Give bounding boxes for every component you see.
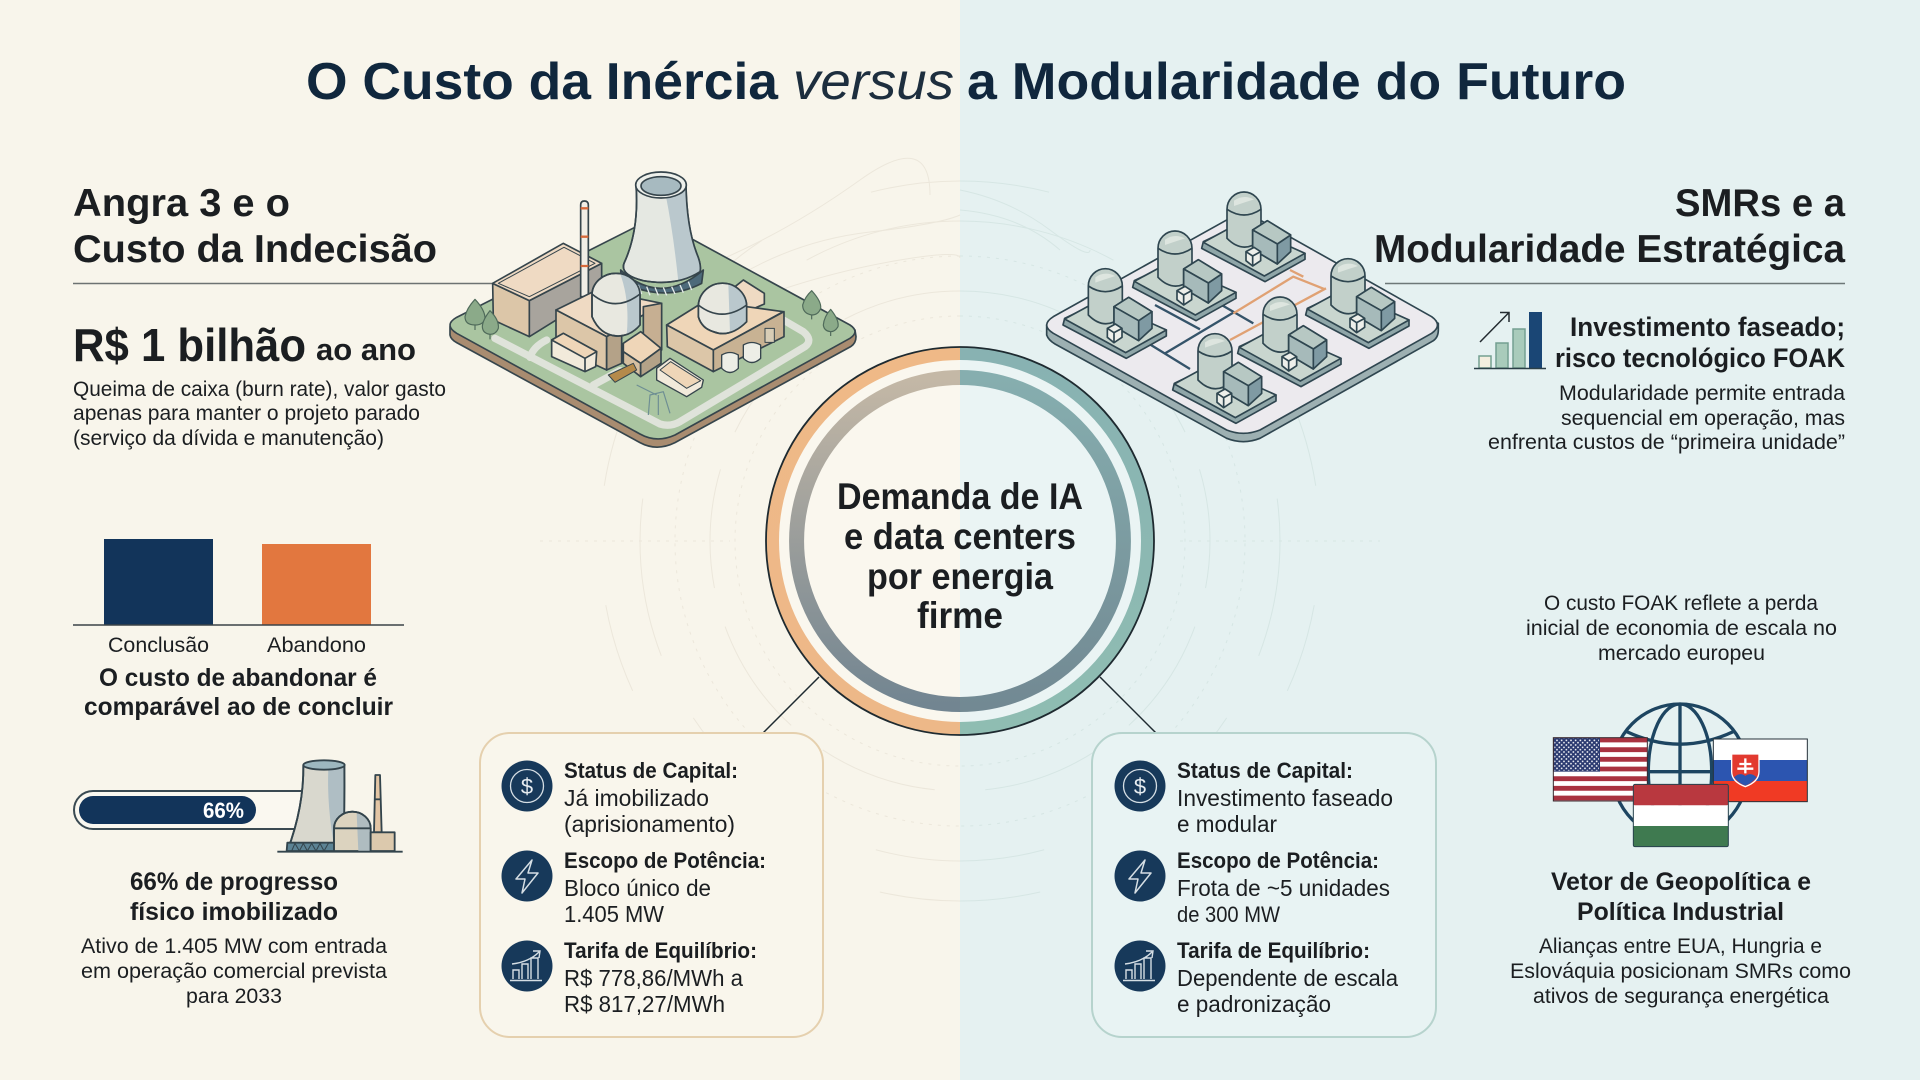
flag: USA	[1553, 738, 1647, 801]
text block: 66% progress: para 2033	[186, 984, 282, 1008]
row: status de capital: e modular	[1177, 811, 1277, 837]
small auxiliary building	[608, 358, 703, 415]
panel: SMR data box	[1092, 733, 1436, 1037]
text block: investimento faseado	[1488, 312, 1845, 454]
title	[306, 53, 1626, 111]
SMR modules	[1063, 192, 1409, 423]
row: escopo de potencia: 1.405 MW	[564, 901, 664, 927]
SMR base plate	[1047, 211, 1438, 442]
text block: investimento faseado: sequencial em operação, mas	[1561, 406, 1845, 430]
text block: custo FOAK: O custo FOAK reflete a perda	[1544, 591, 1818, 615]
row: escopo de potencia	[1177, 848, 1390, 927]
cooling tower	[621, 172, 703, 295]
icon: lightning bolt	[502, 850, 552, 902]
text block: 66% progress: 66% de progresso	[130, 868, 338, 896]
text block: geopolitica: Vetor de Geopolítica e	[1551, 868, 1811, 896]
row: escopo de potencia: Bloco único de	[564, 875, 711, 901]
text block: custo de abandonar	[84, 664, 393, 721]
row: tarifa de equilibrio	[564, 938, 757, 1017]
text block: geopolitica: Eslováquia posicionam SMRs como	[1510, 959, 1851, 983]
row: escopo de potencia: de 300 MW	[1177, 902, 1280, 927]
row: tarifa de equilibrio: Tarifa de Equilíbrio:	[564, 938, 757, 963]
row: tarifa de equilibrio: Tarifa de Equilíbrio:	[1177, 938, 1370, 963]
row: tarifa de equilibrio: R$ 817,27/MWh	[564, 991, 725, 1017]
icon: investment chart	[1474, 312, 1546, 368]
circle text: firme	[917, 595, 1003, 636]
background: right mint half	[960, 0, 1920, 1080]
plant ground platform	[450, 218, 856, 447]
row: escopo de potencia: Escopo de Potência:	[564, 848, 766, 873]
chimney	[581, 201, 588, 297]
reactor block one	[552, 273, 662, 377]
row: escopo de potencia: Frota de ~5 unidades	[1177, 875, 1390, 901]
row: tarifa de equilibrio: R$ 778,86/MWh a	[564, 965, 743, 991]
bar chart: conclusão vs abandono: Conclusão	[108, 633, 209, 657]
heading: Angra 3	[73, 182, 492, 284]
text block: investimento faseado: enfrenta custos de “primeira unidade”	[1488, 430, 1845, 454]
circle text: e data centers	[844, 516, 1076, 557]
text block: 66% progress: em operação comercial prevista	[81, 959, 387, 983]
heading: SMRs	[1374, 182, 1845, 284]
row: status de capital: Já imobilizado	[564, 785, 709, 811]
reactor block two	[667, 280, 784, 372]
title: O Custo da Inércia	[306, 53, 779, 111]
row: status de capital: (aprisionamento)	[564, 811, 735, 837]
row: status de capital: Status de Capital:	[1177, 758, 1353, 783]
text block: burn rate: Queima de caixa (burn rate), valor gasto	[73, 377, 446, 401]
text block: burn rate: apenas para manter o projeto parado	[73, 401, 420, 425]
title: a Modularidade do Futuro	[967, 53, 1626, 111]
text block: custo FOAK	[1526, 591, 1837, 665]
row: status de capital	[1177, 758, 1393, 837]
bar chart: conclusão vs abandono	[73, 539, 404, 657]
heading: SMRs: Modularidade Estratégica	[1374, 228, 1845, 271]
row: status de capital: Status de Capital:	[564, 758, 738, 783]
icon: dollar: $	[1134, 774, 1146, 799]
row: escopo de potencia	[564, 848, 766, 927]
illustration: SMR isometric fleet	[1047, 192, 1438, 442]
flag: Slovakia	[1713, 739, 1807, 802]
progress bar: 66% with plant icon	[74, 760, 403, 852]
heading: Angra 3: Angra 3 e o	[73, 182, 290, 225]
text block: geopolitica: Política Industrial	[1577, 898, 1784, 926]
row: escopo de potencia: Escopo de Potência:	[1177, 848, 1379, 873]
text block: geopolitica	[1510, 868, 1851, 1008]
icon: dollar	[502, 760, 552, 812]
trees	[465, 291, 838, 339]
turbine hall	[493, 243, 602, 337]
text block: investimento faseado: Modularidade permite entrada	[1559, 381, 1845, 405]
text block: burn rate	[73, 377, 446, 450]
connector lines from the circle to the boxes	[763, 677, 1156, 733]
circle text: por energia	[867, 556, 1053, 597]
heading: Angra 3: Custo da Indecisão	[73, 228, 437, 271]
stat: R$ 1 bilhão ao ano: R$ 1 bilhão	[73, 319, 306, 371]
icon: dollar: $	[521, 774, 533, 799]
text block: burn rate: (serviço da dívida e manutenção)	[73, 426, 384, 450]
SMR connection lines	[1148, 270, 1326, 369]
bar chart: conclusão vs abandono: Abandono	[267, 633, 366, 657]
text block: custo FOAK: mercado europeu	[1598, 641, 1765, 665]
icon: rising chart	[502, 940, 552, 992]
text block: investimento faseado: Investimento faseado;	[1570, 312, 1845, 342]
illustration: Angra 3 isometric nuclear plant	[450, 172, 856, 447]
panel: Angra 3 data box	[480, 733, 823, 1037]
globe	[1612, 704, 1748, 839]
flag: Hungary	[1633, 784, 1728, 847]
icon: globe with flags	[1553, 704, 1807, 847]
icon: rising chart	[1114, 940, 1166, 992]
central circle	[766, 347, 1154, 735]
progress bar: 66% with plant icon: 66%	[203, 798, 244, 823]
heading: SMRs: SMRs e a	[1675, 182, 1845, 225]
text block: 66% progress	[81, 868, 387, 1008]
icon: dollar	[1114, 760, 1166, 812]
background: left cream half	[0, 0, 960, 1080]
row: tarifa de equilibrio: Dependente de escala	[1177, 965, 1398, 991]
text block: investimento faseado: risco tecnológico FOAK	[1555, 343, 1845, 373]
row: status de capital	[564, 758, 738, 837]
row: tarifa de equilibrio: e padronização	[1177, 991, 1331, 1017]
text block: geopolitica: Alianças entre EUA, Hungria e	[1539, 934, 1822, 958]
text block: 66% progress: físico imobilizado	[130, 898, 338, 926]
text block: custo de abandonar: O custo de abandonar é	[99, 664, 377, 692]
circle text	[837, 476, 1083, 636]
text block: custo FOAK: inicial de economia de escala no	[1526, 616, 1837, 640]
text block: custo de abandonar: comparável ao de concluir	[84, 693, 393, 721]
title: versus	[793, 53, 954, 111]
icon: lightning bolt	[1114, 850, 1166, 902]
row: tarifa de equilibrio	[1177, 938, 1398, 1017]
row: status de capital: Investimento faseado	[1177, 785, 1393, 811]
text block: geopolitica: ativos de segurança energética	[1533, 984, 1829, 1008]
stat: R$ 1 bilhão ao ano: ao ano	[316, 332, 416, 367]
text block: 66% progress: Ativo de 1.405 MW com entrada	[81, 934, 387, 958]
circle text: Demanda de IA	[837, 476, 1083, 517]
